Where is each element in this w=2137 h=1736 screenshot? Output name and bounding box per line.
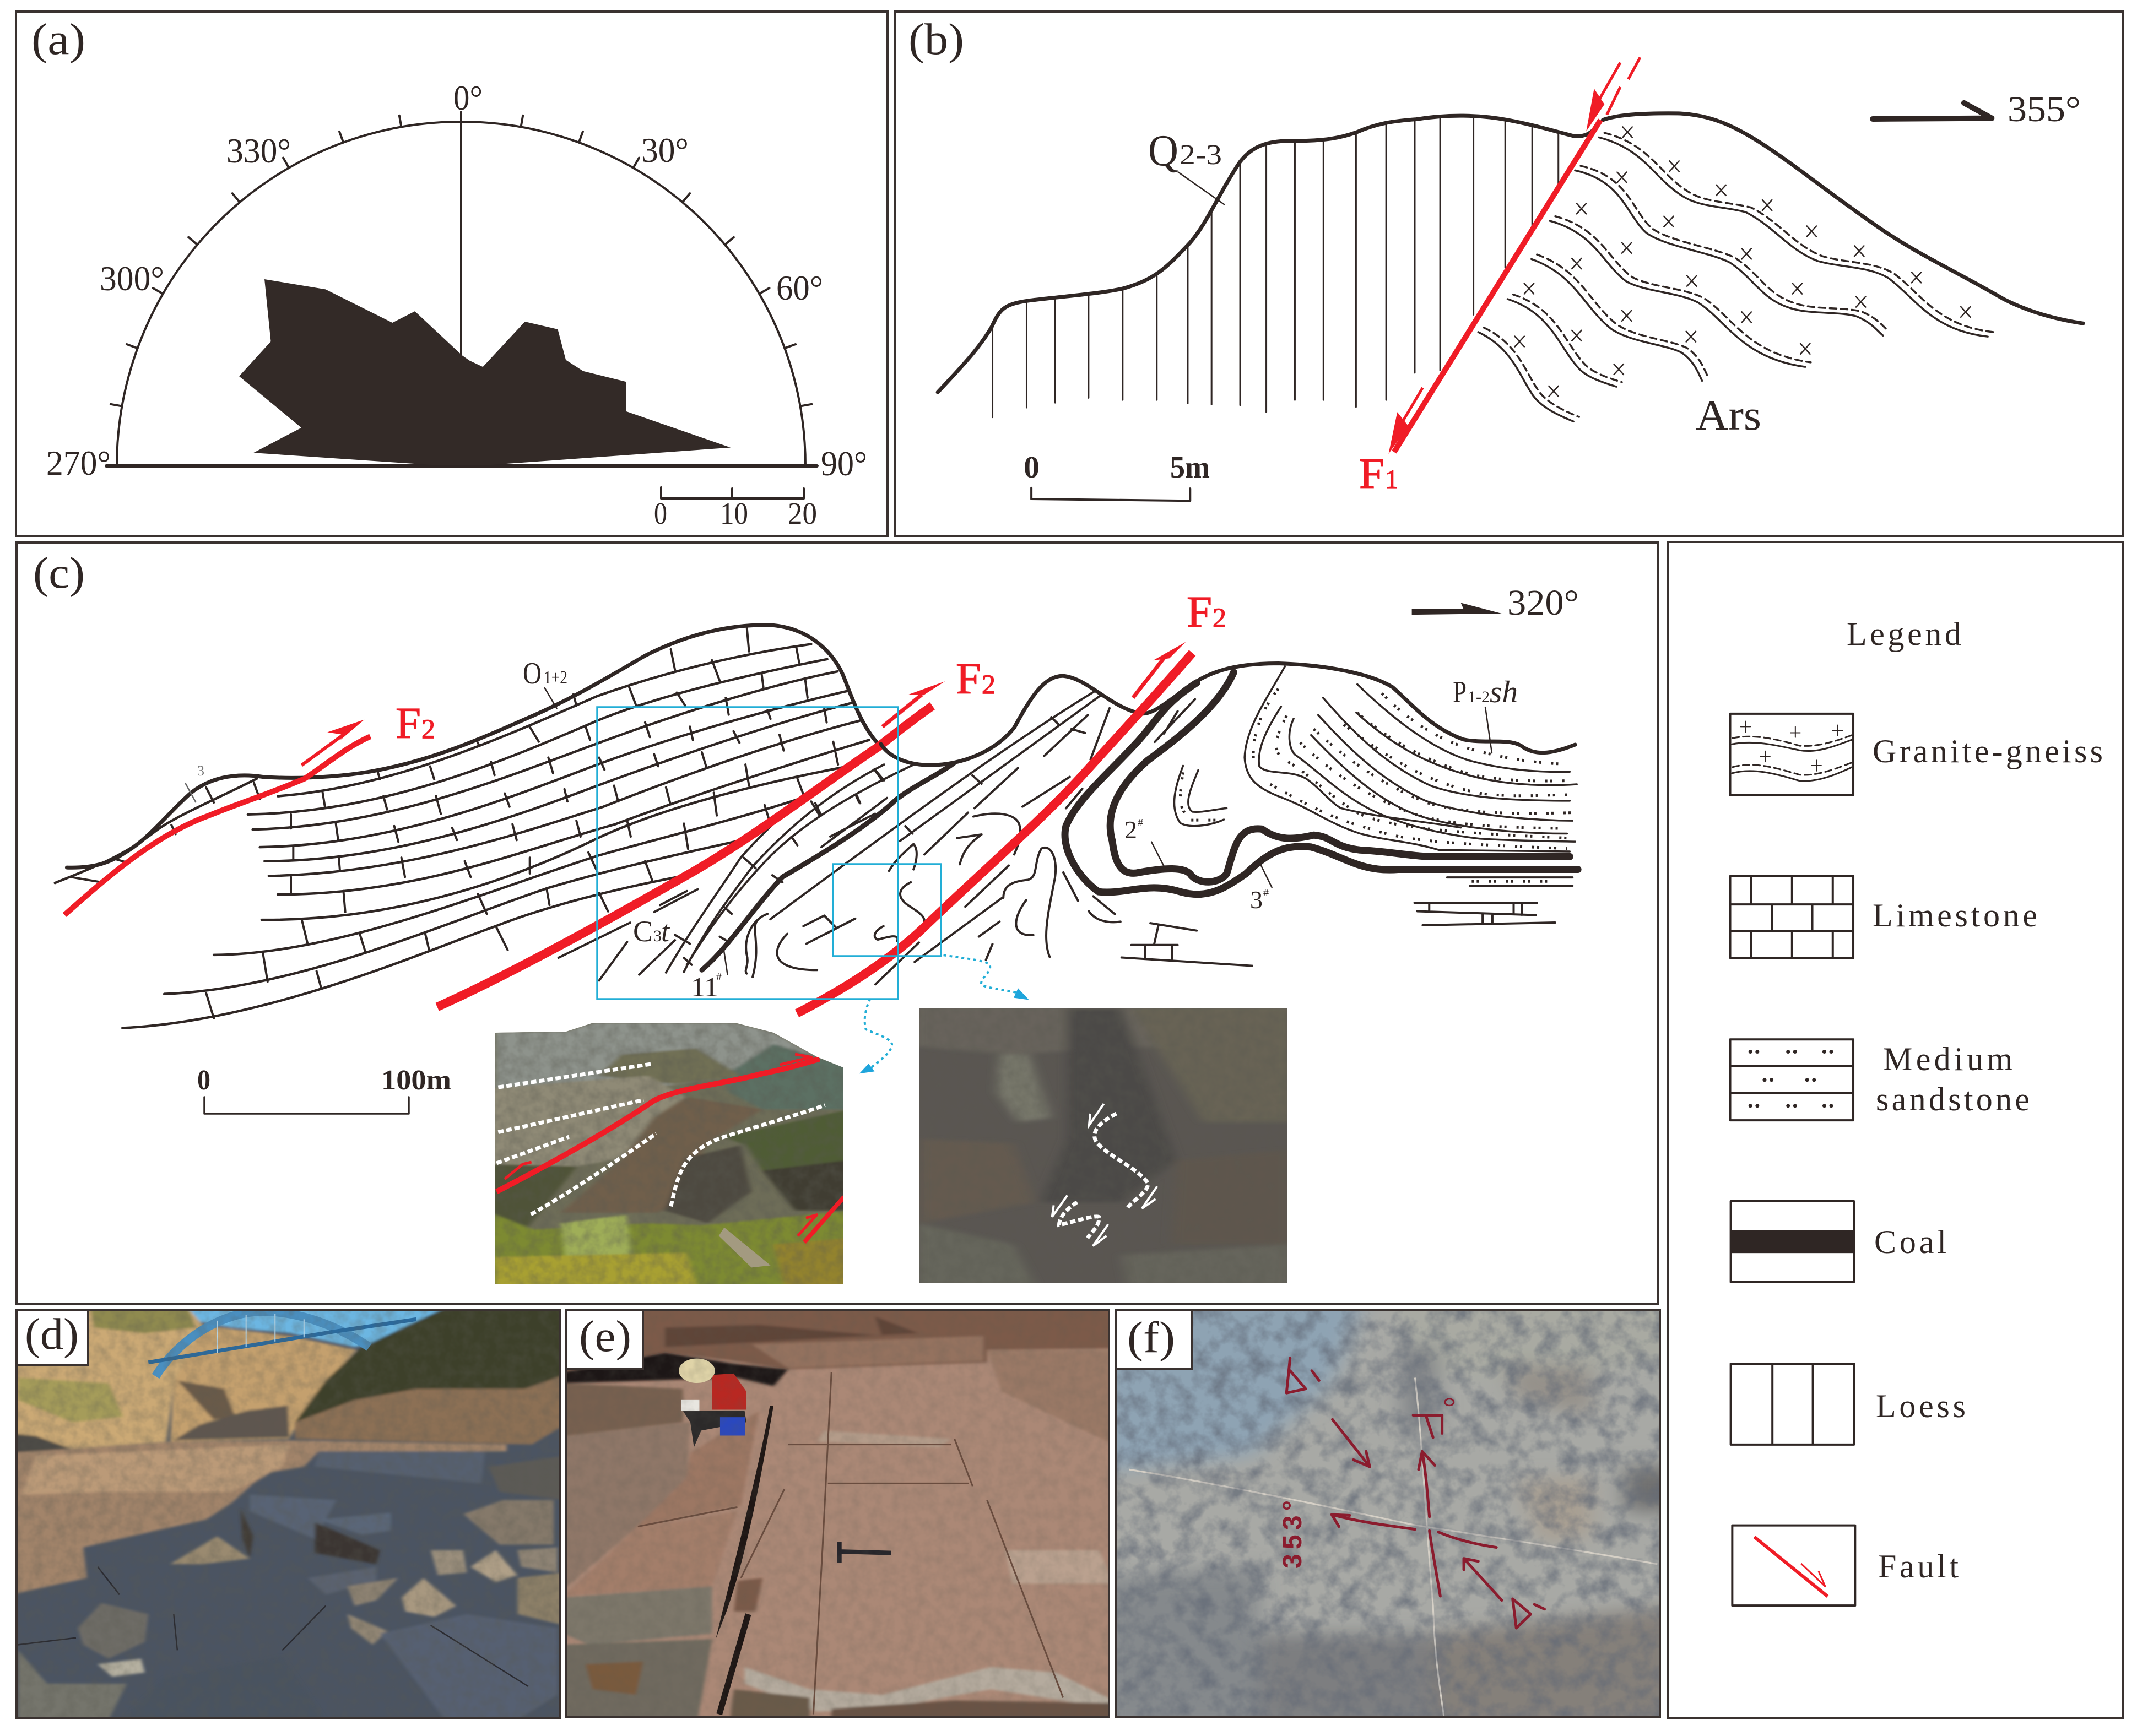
- swatch: coal: [1731, 1201, 1854, 1282]
- panel (b) text: [1024, 89, 2081, 497]
- rose diagram petals: [239, 279, 731, 465]
- C3t strata lines: [559, 764, 914, 980]
- panel (b) text: F: [1359, 449, 1384, 497]
- Q2-3 leader line: [1178, 172, 1224, 204]
- legend labels: Fault: [1878, 1548, 1959, 1585]
- section c: right part: [770, 603, 1578, 1013]
- rose diagram semicircle and ticks: [106, 112, 817, 466]
- legend heading: Legend: [1847, 616, 1961, 652]
- direction arrow b: [1873, 103, 1992, 119]
- large cyan inset box: [597, 707, 898, 999]
- panel: legend: [1668, 542, 2123, 1718]
- panel (c) frame: [17, 542, 1658, 1304]
- rose diagram angle labels: 270°: [46, 443, 111, 482]
- panel (c) text: C: [633, 915, 653, 948]
- panel (c) text: 1-2: [1468, 688, 1490, 706]
- fault F2 displacement arrows: [883, 642, 1186, 726]
- legend labels: Loess: [1876, 1388, 1966, 1424]
- panel (a): rose diagram: [16, 12, 888, 536]
- panel (b) label: (b): [908, 15, 964, 64]
- panel (b) text: Ars: [1696, 391, 1761, 439]
- panel (b) text: 5m: [1170, 451, 1210, 485]
- gneiss cross marks: [1515, 127, 1970, 397]
- photo e frame: [566, 1310, 1109, 1717]
- panel (d): river outcrop photograph: [11, 1308, 565, 1720]
- panel (a) frame: [16, 12, 888, 536]
- panel (b) text: 0: [1024, 451, 1040, 485]
- panel (c) text: sh: [1490, 675, 1518, 709]
- direction arrow c: [1412, 603, 1502, 615]
- panel (b) text: 1: [1385, 465, 1398, 494]
- fault F2 east: [797, 653, 1192, 1013]
- section c: left part: [55, 625, 954, 1028]
- panel (c) text: F: [396, 699, 421, 748]
- panel (c) text: #: [1263, 887, 1269, 899]
- panel (c) text: 3: [197, 763, 204, 779]
- rose diagram angle labels: 0°: [453, 78, 483, 117]
- limestone bedding: [55, 644, 869, 1028]
- panel (c) text: 320°: [1507, 583, 1579, 623]
- rose diagram angle labels: 300°: [100, 259, 164, 298]
- photo f label: (f): [1127, 1314, 1175, 1362]
- swatch: fault: [1732, 1526, 1855, 1605]
- panel (c) text: 11: [691, 972, 718, 1002]
- swatch: medium sandstone: [1730, 1039, 1853, 1120]
- rose diagram angle labels: 60°: [776, 268, 823, 307]
- central fold strata: [770, 691, 1195, 984]
- geological hammer: [840, 1542, 891, 1563]
- limestone cross ticks: [71, 625, 838, 1018]
- swatch: limestone: [1730, 876, 1853, 958]
- fault F1 with displacement arrows: [1388, 57, 1640, 454]
- fault F2 west: [64, 720, 370, 915]
- rose diagram scale bar: 0: [654, 497, 667, 531]
- panel (c) text: [197, 583, 1579, 1096]
- small leader lines: [545, 688, 728, 975]
- gneiss foliation dashed lines: [1484, 133, 1993, 417]
- rose diagram scale bar: 20: [788, 497, 817, 531]
- legend labels: sandstone: [1876, 1081, 2030, 1117]
- rose diagram angle labels: 330°: [226, 131, 291, 170]
- panel (a) label: (a): [31, 15, 85, 64]
- panel (c) text: #: [1138, 817, 1143, 829]
- coal seam 11: [702, 763, 954, 970]
- field note 353°: 353°: [1278, 1500, 1307, 1569]
- connector to left photograph: [859, 999, 892, 1073]
- photo e image: [564, 1308, 1114, 1720]
- coal seams 2 and 3: [1065, 672, 1578, 894]
- small cyan inset box: [833, 864, 941, 956]
- rose diagram angle labels: 30°: [641, 131, 689, 170]
- panel (c) text: 0: [197, 1065, 210, 1096]
- sandstone bedding: [1174, 666, 1577, 851]
- panel (b) frame: [895, 12, 2123, 536]
- photo d label: [17, 1310, 88, 1365]
- panel (c) text: F: [956, 655, 981, 703]
- legend swatches: [1730, 714, 1855, 1605]
- rose diagram scale bar: [654, 487, 817, 531]
- panel (c) label: (c): [33, 549, 85, 598]
- panel (c) text: 1+2: [544, 668, 567, 688]
- ground surface: [938, 113, 2083, 392]
- swatch: granite-gneiss: [1730, 714, 1853, 795]
- red field markings: [1286, 1358, 1545, 1628]
- photograph: small fold outcrop: [915, 1006, 1291, 1284]
- panel (c) text: 2: [421, 713, 435, 744]
- photo d image: [11, 1308, 565, 1720]
- panel (c) text: P: [1453, 675, 1467, 709]
- legend frame: [1668, 542, 2123, 1718]
- panel (c) text: F: [1187, 588, 1212, 637]
- panel (c) text: O: [523, 657, 542, 691]
- rose diagram angle labels: [46, 78, 867, 483]
- connector to right photograph: [944, 955, 1029, 1000]
- photo d frame: [17, 1310, 560, 1718]
- gneiss foliation solid lines: [1478, 137, 1988, 421]
- panel (c) text: t: [661, 915, 670, 948]
- small leader lines: [1151, 707, 1492, 887]
- panel (b): F1 fault section: [895, 12, 2123, 536]
- panel (b) text: 2-3: [1180, 139, 1222, 171]
- panel (c) text: 3: [1250, 886, 1263, 914]
- panel (c) text: 2: [1124, 816, 1137, 844]
- person with hat: [679, 1359, 746, 1447]
- scale bar b: [1031, 488, 1190, 501]
- photo f image: [1100, 1294, 1679, 1728]
- loess vertical hatching: [993, 116, 1559, 417]
- panel (c) text: #: [716, 971, 722, 983]
- photo f frame: [1116, 1310, 1660, 1717]
- legend labels: [1873, 733, 2103, 1585]
- scale bar c: [204, 1097, 409, 1114]
- photo e label: (e): [579, 1312, 631, 1361]
- panel (f): conjugate joints photograph: [1100, 1294, 1679, 1728]
- legend labels: Coal: [1874, 1224, 1946, 1260]
- ground surface right: [881, 663, 1575, 765]
- rose diagram scale bar: 10: [720, 497, 748, 531]
- photo e label: [566, 1310, 643, 1369]
- sandstone dots: [1181, 689, 1572, 881]
- ground surface left: [67, 625, 881, 867]
- panel (b) text: Q: [1148, 127, 1178, 175]
- rose diagram angle labels: 90°: [821, 444, 867, 483]
- fault F2 central: [437, 706, 932, 1007]
- swatch: loess: [1731, 1364, 1854, 1445]
- legend labels: Limestone: [1873, 897, 2037, 934]
- panel (c): F2 thrust section and photographs: [17, 542, 1658, 1304]
- panel (c) text: 3: [653, 927, 662, 945]
- photo d label: (d): [25, 1310, 79, 1359]
- section drawing b: [938, 57, 2083, 501]
- panel (e): fractured sandstone photograph: [564, 1308, 1114, 1720]
- photo f label: [1116, 1310, 1192, 1369]
- photograph: folded strata hillside: [495, 1023, 843, 1284]
- panel (b) text: 355°: [2008, 89, 2081, 129]
- lower right strata blocks: [1122, 877, 1572, 966]
- panel (c) text: 2: [982, 669, 996, 699]
- panel (c) text: 2: [1213, 602, 1226, 633]
- legend labels: Medium: [1883, 1041, 2012, 1077]
- legend labels: Granite-gneiss: [1873, 733, 2103, 769]
- panel (c) text: 100m: [381, 1065, 451, 1096]
